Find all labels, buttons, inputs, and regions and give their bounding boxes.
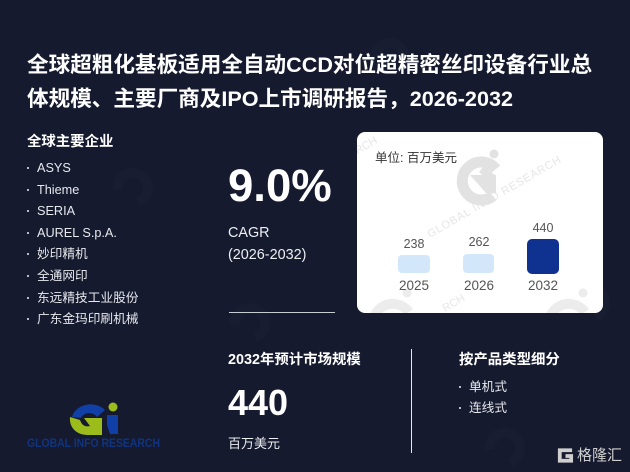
market size heading: 2032年预计市场规模 xyxy=(228,352,361,368)
company list: 全通网印 xyxy=(37,269,88,283)
watermark: Gelonghui xyxy=(558,447,622,464)
logo: Global Info Research xyxy=(27,402,160,450)
company list: 东远精技工业股份 xyxy=(37,291,138,305)
CAGR label: (2026-2032) xyxy=(228,246,306,262)
segment list: 单机式 xyxy=(469,380,507,394)
company list: SERIA xyxy=(37,204,75,218)
value 262: 262 xyxy=(469,235,489,249)
unit label: 单位: 百万美元 xyxy=(375,151,457,165)
logo: Global Info Research: GLOBAL INFO RESEARCH xyxy=(27,438,160,450)
market size value: 440 xyxy=(228,382,288,423)
company list xyxy=(27,161,138,326)
wordmark: 格隆汇 xyxy=(577,447,622,464)
panel: product segments xyxy=(459,352,560,415)
title: 体规模、主要厂商及IPO上市调研报告，2026-2032 xyxy=(27,86,513,111)
company list: ASYS xyxy=(37,161,71,175)
heading: key companies: 全球主要企业 xyxy=(27,134,113,150)
icon: G mark xyxy=(558,448,574,463)
bar 2026 xyxy=(463,254,494,273)
CAGR label xyxy=(228,225,306,262)
value 238: 238 xyxy=(404,237,424,251)
panel: key companies xyxy=(27,134,138,326)
title: 全球超粗化基板适用全自动CCD对位超精密丝印设备行业总 xyxy=(27,52,592,77)
company list: 妙印精机 xyxy=(37,247,88,261)
CAGR value: 9.0% xyxy=(228,160,332,211)
segment list: 连线式 xyxy=(469,401,507,415)
company list: AUREL S.p.A. xyxy=(37,226,117,240)
card watermark: GLOBAL INFO RESEARCH xyxy=(426,154,563,241)
segment list xyxy=(459,380,507,415)
year 2025: 2025 xyxy=(399,278,429,293)
market size unit: 百万美元 xyxy=(228,436,280,451)
heading: product type: 按产品类型细分 xyxy=(459,352,560,368)
CAGR underline xyxy=(229,312,335,313)
bar 2025 xyxy=(398,255,430,273)
year 2032: 2032 xyxy=(528,278,558,293)
company list: 广东金玛印刷机械 xyxy=(37,312,138,326)
title xyxy=(27,52,592,111)
company list: Thieme xyxy=(37,183,79,197)
card watermark xyxy=(357,135,589,313)
vertical divider xyxy=(411,349,412,453)
CAGR label: CAGR xyxy=(228,225,270,241)
bar 2032 xyxy=(527,239,559,274)
value 440: 440 xyxy=(533,221,553,235)
year 2026: 2026 xyxy=(464,278,494,293)
panel: bar chart card xyxy=(357,132,603,313)
